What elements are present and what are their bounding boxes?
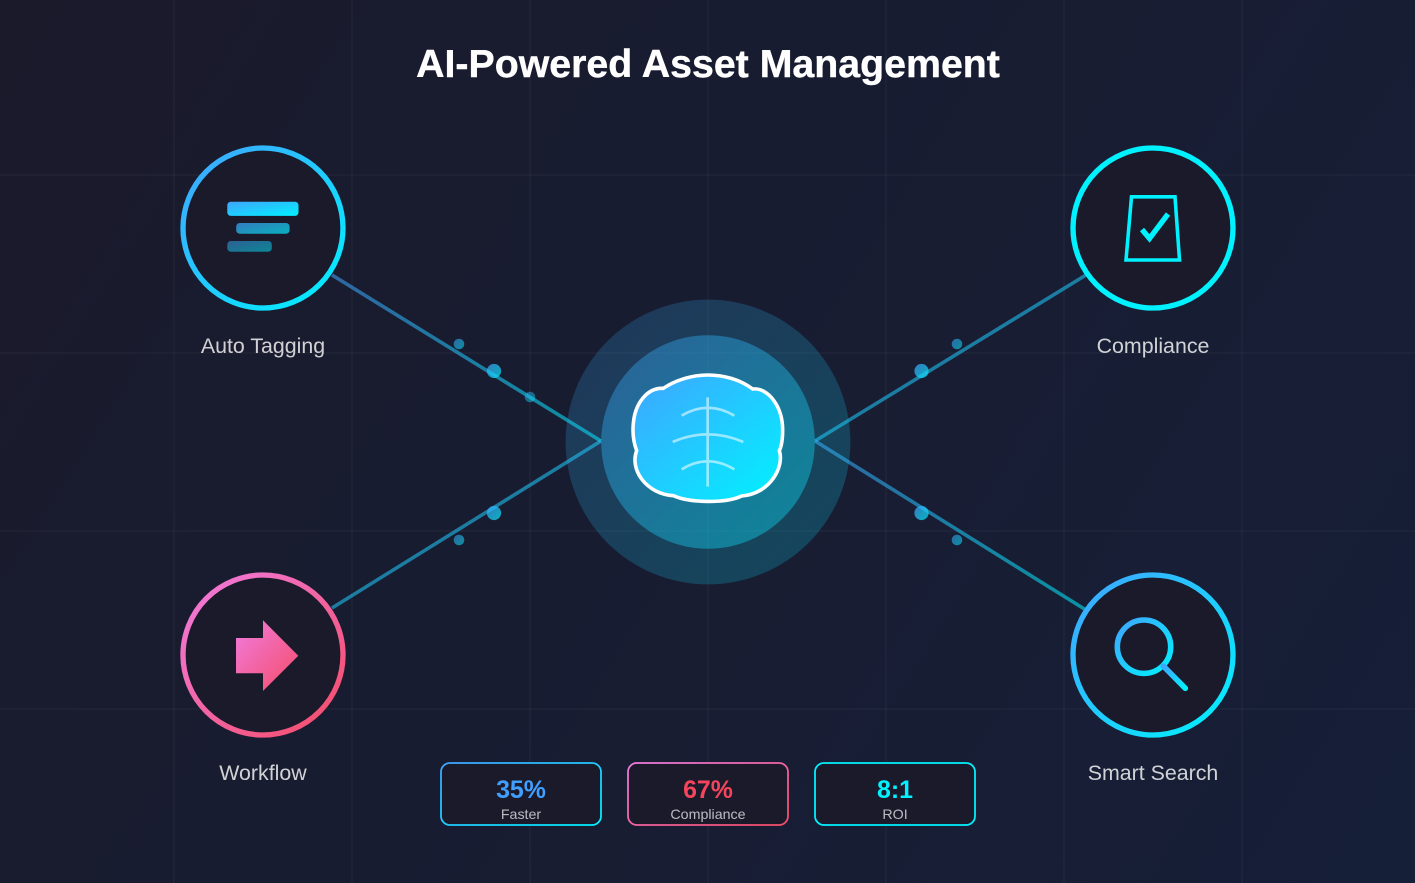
node ring xyxy=(183,148,343,308)
node: Auto Tagging xyxy=(183,148,343,358)
stat card: ROI: ROI xyxy=(882,807,908,823)
stat card: ROI xyxy=(815,763,975,825)
node ring xyxy=(1073,575,1233,735)
data flow dots xyxy=(454,339,962,545)
label: Auto Tagging xyxy=(201,334,325,358)
stat card: ROI: 8:1 xyxy=(877,776,913,804)
stat card: Compliance xyxy=(628,763,788,825)
central AI hub xyxy=(566,300,850,584)
node: Compliance xyxy=(1073,148,1233,358)
node: Workflow xyxy=(183,575,343,785)
hub inner halo xyxy=(601,335,815,549)
node ring xyxy=(183,575,343,735)
label: Compliance xyxy=(1097,334,1209,358)
icon: brain xyxy=(633,375,783,501)
connector lines xyxy=(332,275,1086,610)
stat card: Compliance: 67% xyxy=(683,776,733,804)
node ring xyxy=(1073,148,1233,308)
label: Workflow xyxy=(219,761,307,785)
icon: magnifier xyxy=(1117,620,1185,688)
title: AI-Powered Asset Management xyxy=(416,42,1000,86)
node: Smart Search xyxy=(1073,575,1233,785)
icon: arrow xyxy=(236,620,298,691)
stat card: Faster: Faster xyxy=(501,807,541,823)
stat card: Faster xyxy=(441,763,601,825)
hub outer halo xyxy=(566,300,850,584)
icon: document check xyxy=(1126,197,1180,260)
stat card: Compliance: Compliance xyxy=(670,807,746,823)
stat card: Faster: 35% xyxy=(496,776,546,804)
label: Smart Search xyxy=(1088,761,1218,785)
icon: tag bars xyxy=(227,202,298,252)
